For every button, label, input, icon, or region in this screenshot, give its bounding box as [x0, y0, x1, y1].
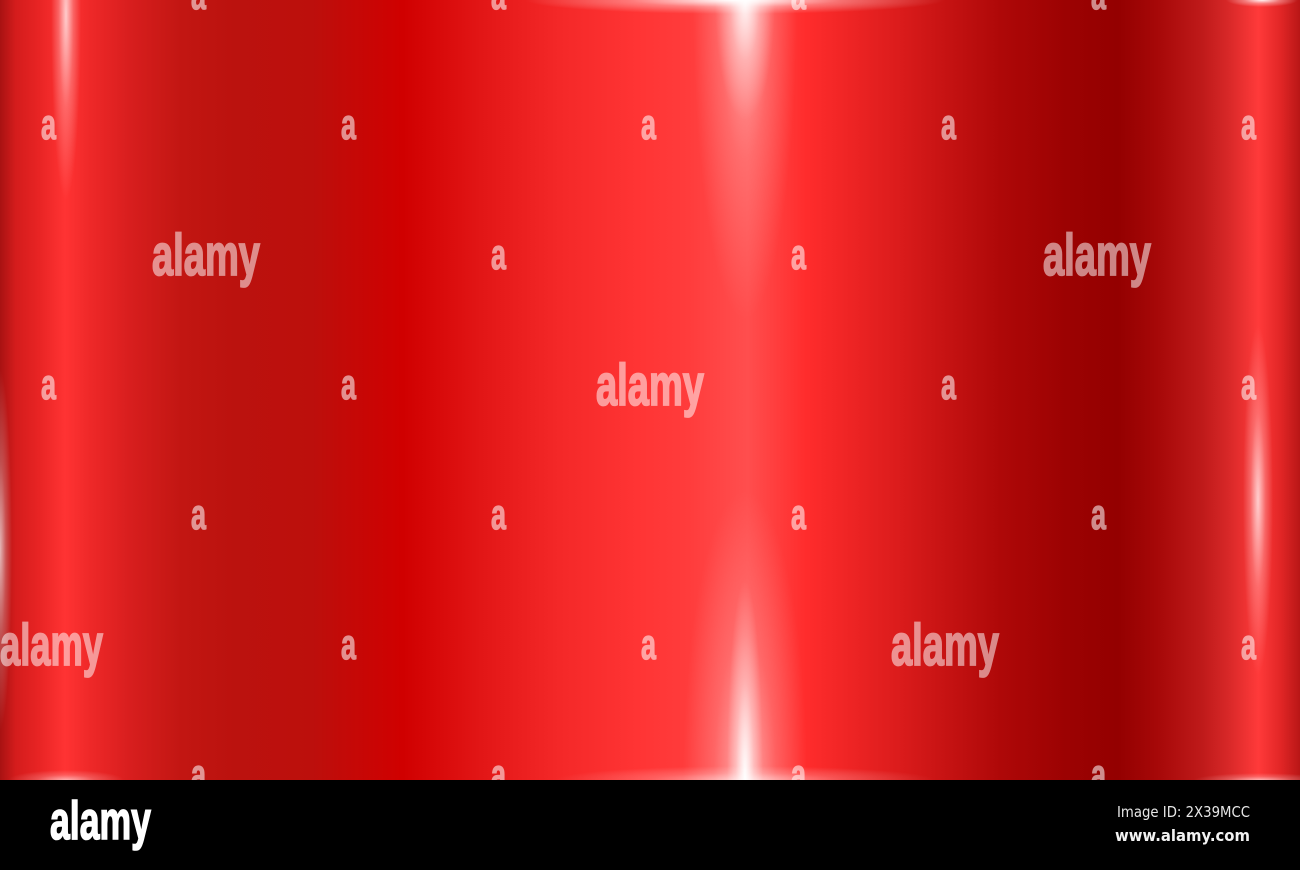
- watermark: small repeated letter a: a: [341, 621, 357, 669]
- watermark: large alamy wordmarks: alamy: [596, 353, 704, 418]
- watermark: small repeated letter a: a: [1091, 491, 1107, 539]
- footer alamy logo: alamy: [50, 791, 151, 851]
- watermark: small repeated letter a: a: [191, 491, 207, 539]
- watermark: large alamy wordmarks: [0, 223, 1151, 678]
- watermark: small repeated letter a: a: [1091, 751, 1107, 799]
- watermark: small repeated letter a: a: [491, 491, 507, 539]
- watermark: large alamy wordmarks: alamy: [0, 613, 103, 678]
- watermark: large alamy wordmarks: alamy: [891, 613, 999, 678]
- watermark: small repeated letter a: a: [791, 491, 807, 539]
- watermark: small repeated letter a: a: [941, 101, 957, 149]
- panel: black footer bar: [0, 780, 1300, 870]
- watermark: small repeated letter a: a: [341, 101, 357, 149]
- watermark: small repeated letter a: a: [791, 231, 807, 279]
- watermark: small repeated letter a: a: [641, 621, 657, 669]
- watermark: small repeated letter a: a: [641, 101, 657, 149]
- watermark: small repeated letter a: a: [1241, 621, 1257, 669]
- watermark: small repeated letter a: a: [1241, 361, 1257, 409]
- watermark: small repeated letter a: a: [41, 361, 57, 409]
- watermark: small repeated letter a: a: [341, 361, 357, 409]
- watermark: small repeated letter a: a: [41, 101, 57, 149]
- website address: www.alamy.com: [1115, 826, 1250, 845]
- watermark: small repeated letter a: a: [491, 751, 507, 799]
- watermark: small repeated letter a: a: [1241, 101, 1257, 149]
- watermark: small repeated letter a: a: [941, 361, 957, 409]
- watermark: small repeated letter a: a: [491, 231, 507, 279]
- watermark: large alamy wordmarks: alamy: [152, 223, 260, 288]
- watermark: large alamy wordmarks: alamy: [1043, 223, 1151, 288]
- watermark: small repeated letter a: a: [191, 751, 207, 799]
- image ID text: Image ID: 2X39MCC: [1117, 803, 1250, 821]
- watermark: small repeated letter a: a: [791, 751, 807, 799]
